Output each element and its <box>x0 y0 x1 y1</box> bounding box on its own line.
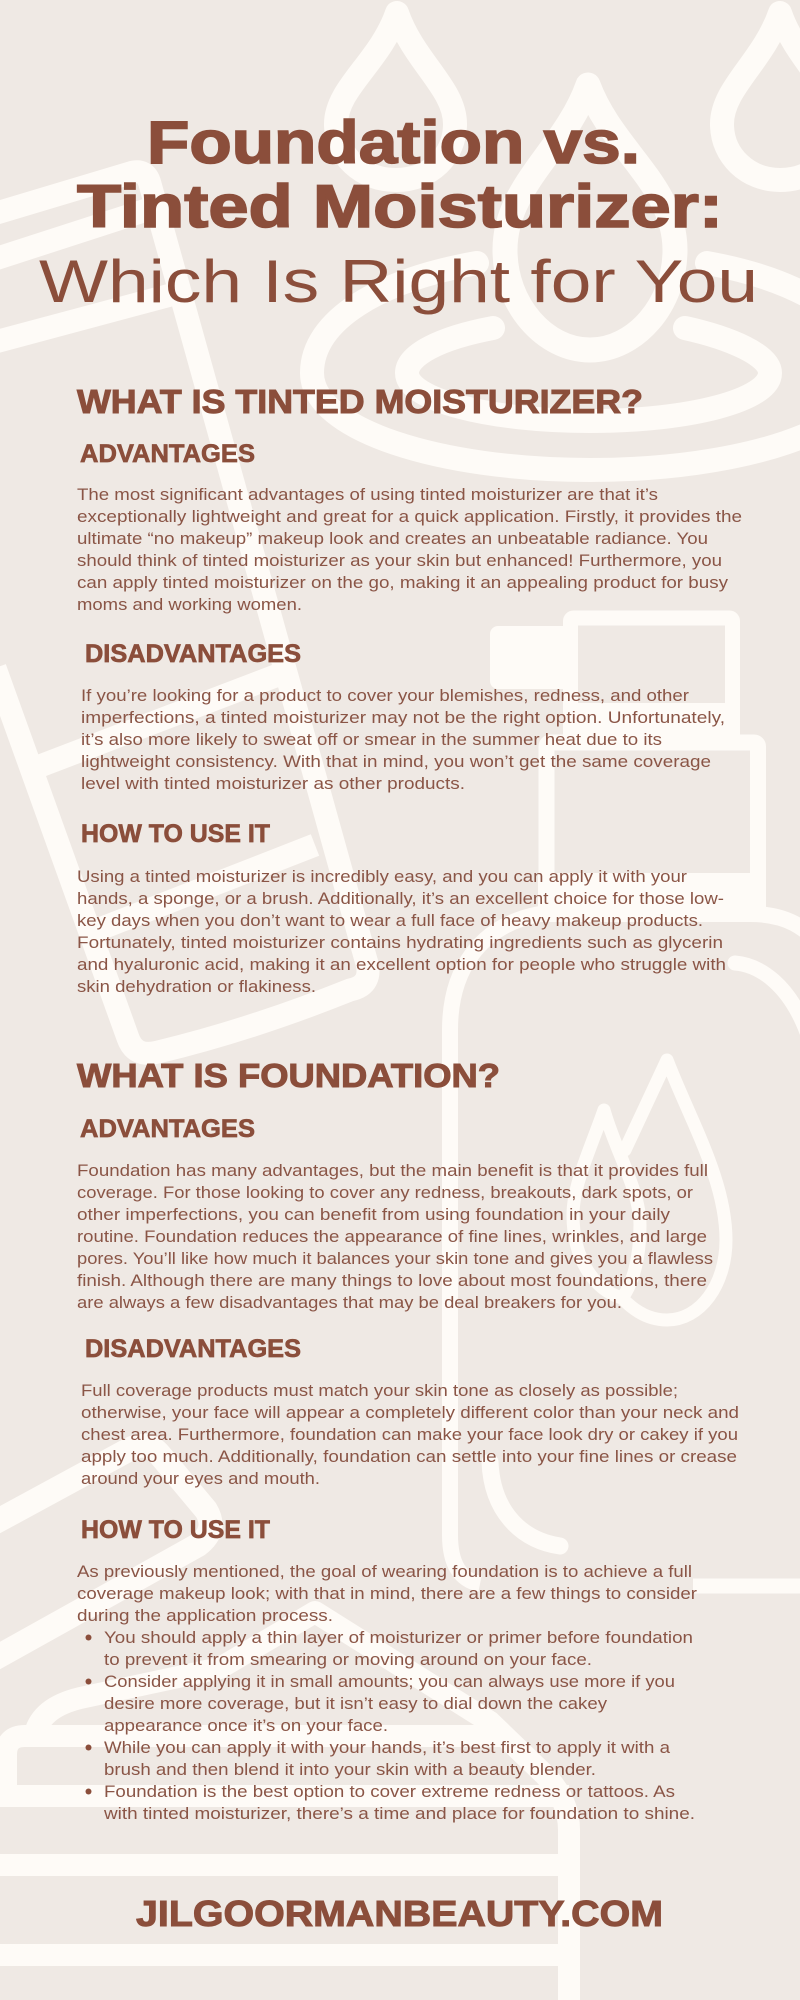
icon: bottom left brush chevron <box>0 1446 210 1660</box>
text block: tinted moisturizer disadvantages: level with tinted moisturizer as other products. <box>81 775 465 793</box>
text block: tinted moisturizer disadvantages: lightweight consistency. With that in mind, you won’t get the same coverage <box>81 753 711 771</box>
text block: tinted moisturizer usage: and hyaluronic acid, making it an excellent option for people who struggle with <box>77 956 726 974</box>
text block: tinted moisturizer usage: skin dehydration or flakiness. <box>77 978 316 996</box>
text block: foundation advantages: coverage. For those looking to cover any redness, breakouts, dark spots, or <box>77 1184 694 1202</box>
text block: foundation advantages: routine. Foundation reduces the appearance of fine lines, wrinkles, and large <box>77 1228 707 1246</box>
text block: foundation usage intro: coverage makeup look; with that in mind, there are a few things to consider <box>77 1585 698 1603</box>
bullet list: application tips: You should apply a thin layer of moisturizer or primer before foundation <box>104 1629 693 1647</box>
text block: foundation usage intro <box>77 1563 698 1625</box>
text block: foundation disadvantages <box>81 1382 739 1488</box>
text block: foundation advantages: finish. Although there are many things to love about most foundations, there <box>77 1272 707 1290</box>
bullet list: application tips: appearance once it’s on your face. <box>104 1717 388 1735</box>
heading: what is tinted moisturizer: WHAT IS TINTED MOISTURIZER? <box>77 383 643 420</box>
bullet list: application tips: While you can apply it with your hands, it’s best first to apply it with a <box>104 1739 671 1757</box>
icon: top right water drop <box>722 13 800 180</box>
subheading: disadvantages: DISADVANTAGES <box>85 640 301 668</box>
text block: tinted moisturizer advantages: exceptionally lightweight and great for a quick application. Firstly, it provides the <box>77 508 742 526</box>
text block: tinted moisturizer advantages: moms and working women. <box>77 596 302 614</box>
icon: tilted makeup tube <box>0 172 368 1053</box>
text block: foundation advantages: Foundation has many advantages, but the main benefit is that it provides full <box>77 1162 708 1180</box>
text block: foundation usage intro: As previously mentioned, the goal of wearing foundation is to achieve a full <box>77 1563 692 1581</box>
title <box>39 109 758 315</box>
text block: tinted moisturizer advantages <box>77 486 742 614</box>
text block: tinted moisturizer disadvantages: If you’re looking for a product to cover your blemishes, redness, and other <box>81 687 690 705</box>
text block: tinted moisturizer usage: Using a tinted moisturizer is incredibly easy, and you can apply it with your <box>77 868 688 886</box>
subheading: disadvantages: DISADVANTAGES <box>85 1335 301 1363</box>
icon: cream jar rings <box>312 263 800 470</box>
text block: foundation disadvantages: chest area. Furthermore, foundation can make your face look dry or cakey if you <box>81 1426 738 1444</box>
bullet list: application tips: Consider applying it in small amounts; you can always use more if you <box>104 1673 675 1691</box>
bullet list: application tips: Foundation is the best option to cover extreme redness or tattoos. As <box>104 1783 675 1801</box>
title: Foundation vs. <box>147 109 640 176</box>
text block: foundation disadvantages: Full coverage products must match your skin tone as closely as possible; <box>81 1382 678 1400</box>
text block: tinted moisturizer disadvantages: it’s also more likely to sweat off or smear in the summer heat due to its <box>81 731 662 749</box>
text block: foundation disadvantages: apply too much. Additionally, foundation can settle into your fine lines or crease <box>81 1448 737 1466</box>
title: Tinted Moisturizer: <box>77 173 723 240</box>
icon: top water drop <box>336 13 455 180</box>
icon: centre water drop <box>505 85 675 350</box>
text block: foundation disadvantages: around your eyes and mouth. <box>81 1470 320 1488</box>
text block: tinted moisturizer usage <box>77 868 726 996</box>
subheading: how to use it: HOW TO USE IT <box>81 820 270 848</box>
text block: foundation usage intro: during the application process. <box>77 1607 333 1625</box>
icon: foundation bottle <box>450 618 800 1586</box>
text block: tinted moisturizer usage: Fortunately, tinted moisturizer contains hydrating ingredients such as glycerin <box>77 934 723 952</box>
text block: tinted moisturizer advantages: should think of tinted moisturizer as your skin but enhanced! Furthermore, you <box>77 552 722 570</box>
text block: foundation advantages <box>77 1162 713 1312</box>
bullet list: application tips <box>86 1629 695 1823</box>
subheading: advantages: ADVANTAGES <box>80 440 255 468</box>
footer website: JILGOORMANBEAUTY.COM <box>136 1893 663 1934</box>
bullet list: application tips: brush and then blend it into your skin with a beauty blender. <box>104 1761 596 1779</box>
subheading: how to use it: HOW TO USE IT <box>81 1516 270 1544</box>
text block: foundation advantages: other imperfections, you can benefit from using foundation in your daily <box>77 1206 671 1224</box>
bullet list: application tips: desire more coverage, but it isn’t easy to dial down the cakey <box>104 1695 608 1713</box>
bullet list: application tips: to prevent it from smearing or moving around on your face. <box>104 1651 592 1669</box>
text block: tinted moisturizer advantages: can apply tinted moisturizer on the go, making it an appealing product for busy <box>77 574 729 592</box>
text block: tinted moisturizer usage: key days when you don’t want to wear a full face of heavy makeup products. <box>77 912 703 930</box>
text block: tinted moisturizer usage: hands, a sponge, or a brush. Additionally, it’s an excellent choice for those low- <box>77 890 724 908</box>
icon: bottom left compact box <box>0 1612 569 2000</box>
icon: paired droplets on bottle <box>573 1060 726 1320</box>
text block: foundation advantages: are always a few disadvantages that may be deal breakers for you. <box>77 1294 622 1312</box>
panel: what is foundation <box>77 1057 739 1823</box>
panel: what is tinted moisturizer <box>77 383 742 996</box>
text block: tinted moisturizer disadvantages <box>81 687 725 793</box>
title: Which Is Right for You <box>39 248 758 315</box>
text block: tinted moisturizer disadvantages: imperfections, a tinted moisturizer may not be the right option. Unfortunately, <box>81 709 725 727</box>
bullet list: application tips: with tinted moisturizer, there’s a time and place for foundation to shine. <box>103 1805 695 1823</box>
heading: what is foundation: WHAT IS FOUNDATION? <box>77 1057 500 1094</box>
text block: foundation advantages: pores. You’ll like how much it balances your skin tone and gives you a flawless <box>77 1250 713 1268</box>
text block: tinted moisturizer advantages: ultimate “no makeup” makeup look and creates an unbeatable radiance. You <box>77 530 708 548</box>
text block: foundation disadvantages: otherwise, your face will appear a completely different color than your neck and <box>81 1404 739 1422</box>
subheading: advantages: ADVANTAGES <box>80 1115 255 1143</box>
text block: tinted moisturizer advantages: The most significant advantages of using tinted moisturizer are that it’s <box>77 486 658 504</box>
